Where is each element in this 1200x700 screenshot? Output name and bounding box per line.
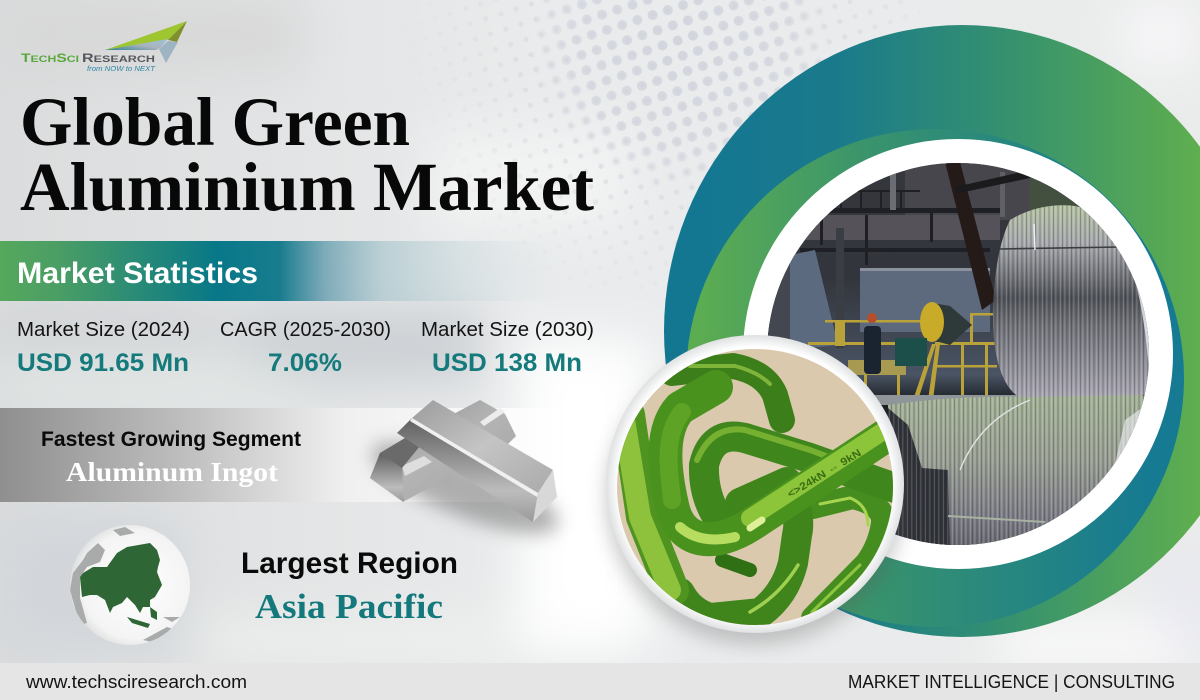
carabiner: middle loop [697,429,895,518]
back ingot [370,400,516,502]
footer website: www.techsciresearch.com [25,671,247,692]
white photo frame [743,139,1173,569]
stat: market size 2024 [17,318,190,377]
stat: market size 2024: Market Size (2024) [17,318,190,341]
carabiner: small hook tip [722,560,750,570]
region value: Asia Pacific [255,587,443,626]
segment value: Aluminum Ingot [66,457,278,487]
region heading: Largest Region [241,547,458,580]
lower coil [888,395,1144,545]
factory structure [760,160,1100,405]
carabiner stamping: <>24kN ⇔ 9kN [785,447,864,501]
title [20,84,594,225]
stat: market size 2030: USD 138 Mn [432,349,582,377]
outer ring [664,25,1200,637]
land: Asia highlighted [80,543,162,613]
panel: largest region [241,547,458,626]
stat: CAGR: 7.06% [268,349,342,377]
statistics banner: Market Statistics [17,257,258,290]
stat: CAGR: CAGR (2025-2030) [220,318,391,341]
title: Aluminium Market [20,149,594,225]
carabiner: left bar [624,415,672,590]
stat: market size 2030: Market Size (2030) [421,318,594,341]
land: surrounding continents [70,527,180,645]
carabiner: front hook and bar [665,387,885,539]
inner ring [686,129,1184,627]
footer tagline: MARKET INTELLIGENCE | CONSULTING [848,671,1175,692]
icon: globe [70,525,190,645]
segment heading: Fastest Growing Segment [41,428,301,451]
panel: market statistics [0,241,594,377]
panel: fastest growing segment [0,408,560,502]
yellow machine drum [936,304,972,345]
icon: aluminium ingots [362,400,568,551]
logo [21,21,187,73]
front ingot [412,400,553,493]
carabiner: top hook [672,366,782,420]
carabiner: lower centre loop [680,482,798,618]
upper coil [993,205,1165,398]
carabiner: lower right loop [812,497,883,618]
yellow railing [808,313,997,402]
photo: aluminium wire coils in a plant [768,163,1149,545]
logo wordmark: T ECH S CI [21,53,79,65]
photo: green anodised carabiners [605,335,910,645]
stat: market size 2030 [421,318,594,377]
statistics banner [0,241,570,301]
stat: market size 2024: USD 91.65 Mn [17,349,189,377]
logo tagline: from NOW to NEXT [87,64,156,73]
footer [0,663,1200,700]
stat: CAGR [220,318,391,377]
worker [864,313,881,374]
title: Global Green [20,84,410,160]
logo: R ESEARCH [82,53,155,65]
logo wing [105,21,187,63]
